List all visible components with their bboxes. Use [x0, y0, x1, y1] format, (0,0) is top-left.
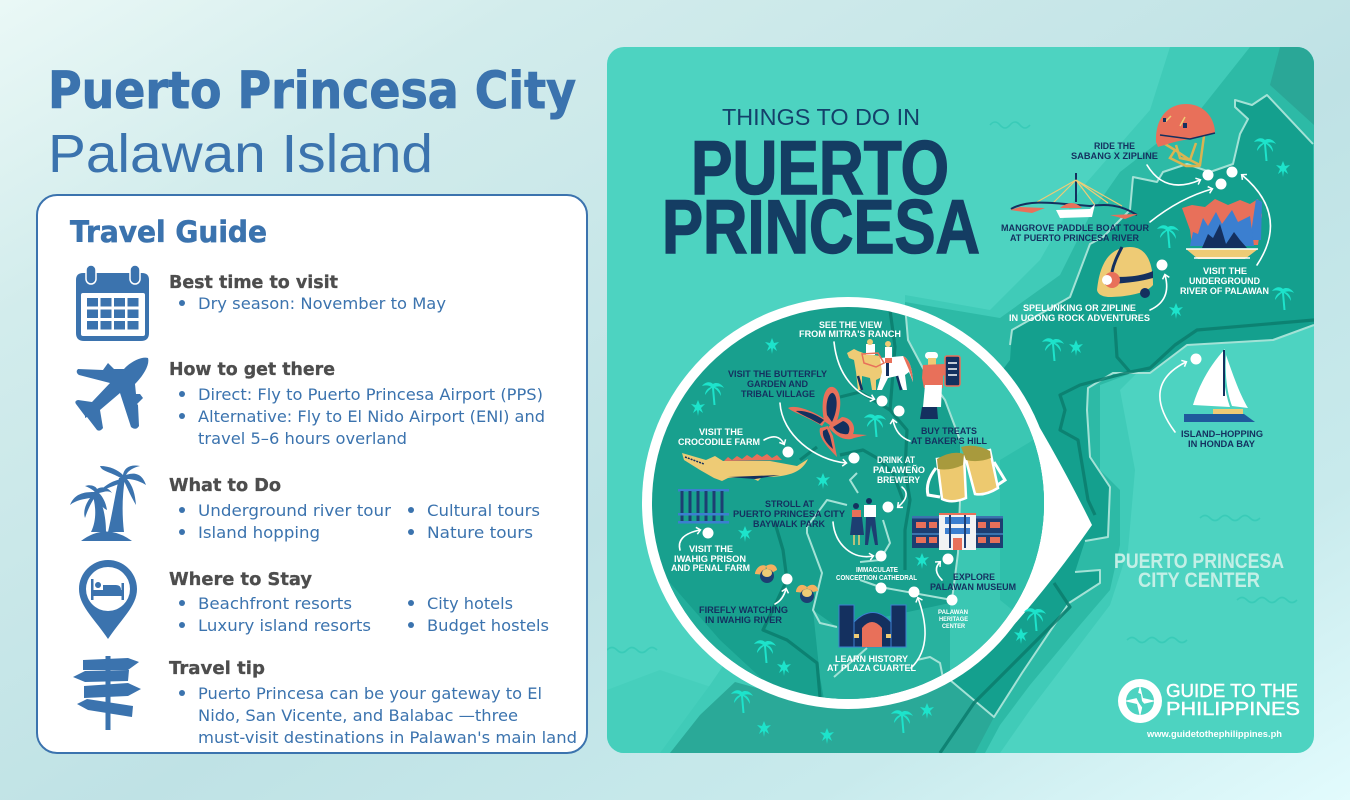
map: city center label: CITY CENTER — [1138, 569, 1260, 592]
map: attraction labels: VISIT THE — [699, 427, 744, 438]
map: attraction labels: FROM MITRA'S RANCH — [799, 329, 901, 340]
map: attraction labels: RIVER OF PALAWAN — [1180, 286, 1269, 297]
section: what to do — [169, 475, 540, 542]
illustration: yellow caving helmet — [1097, 247, 1153, 298]
title: Palawan Island — [48, 124, 433, 184]
map: attraction labels: IN IWAHIG RIVER — [705, 615, 782, 626]
panel: travel guide — [37, 195, 587, 753]
map: attraction labels: IN UGONG ROCK ADVENTURES — [1009, 313, 1151, 324]
map heading: PUERTO — [691, 126, 949, 211]
map: attraction labels: GARDEN AND — [747, 379, 808, 390]
map: location dots — [702, 166, 1238, 606]
section: travel tip: must-visit destinations in Palawan's main land — [198, 728, 577, 747]
map: attraction labels: STROLL AT — [765, 499, 814, 510]
map: teardrop pointer — [1012, 426, 1092, 626]
icon: signpost — [73, 656, 141, 730]
section: how to get there — [169, 359, 545, 448]
icon: location pin with bed — [79, 560, 137, 639]
title: Puerto Princesa City — [48, 62, 576, 121]
map: city center label — [1115, 554, 1284, 587]
map: attraction labels: UNDERGROUND — [1189, 276, 1260, 287]
illustration: beer mugs — [927, 446, 1005, 501]
section: where to stay: City hotels — [427, 594, 513, 613]
panel: map — [607, 47, 1314, 753]
section: how to get there: Direct: Fly to Puerto Princesa Airport (PPS) — [198, 385, 543, 404]
map: attraction labels: IWAHIG PRISON — [674, 554, 746, 565]
illustration: sailboat — [1184, 349, 1255, 422]
icon: palm trees — [70, 465, 146, 541]
map: attraction labels: AT PUERTO PRINCESA RIVER — [1010, 233, 1139, 244]
illustration: orange zipline helmet — [1156, 104, 1215, 166]
illustration: outrigger boat — [1010, 173, 1138, 219]
section: where to stay: Beachfront resorts — [198, 594, 352, 613]
map: attraction labels: FIREFLY WATCHING — [699, 605, 788, 616]
map heading: PRINCESA — [662, 185, 980, 270]
map: white circle frame — [642, 297, 1054, 709]
section: travel tip: Travel tip — [169, 658, 265, 679]
section: how to get there: Alternative: Fly to El Nido Airport (ENI) and — [198, 407, 545, 426]
map: route arrows — [679, 165, 1270, 668]
illustration: butterfly — [788, 387, 867, 457]
map: attraction labels — [671, 141, 1269, 674]
map: attraction labels: VISIT THE BUTTERFLY — [728, 369, 828, 380]
map: attraction labels: BUY TREATS — [921, 426, 978, 437]
logo: guide to the philippines: GUIDE TO THE — [1166, 681, 1298, 701]
icon: airplane — [75, 358, 148, 431]
section: travel tip: Nido, San Vicente, and Balabac —three — [198, 706, 518, 725]
map: city center label: PUERTO PRINCESA — [1114, 550, 1284, 573]
illustration: museum — [912, 513, 1003, 550]
section: what to do: Nature tours — [427, 523, 533, 542]
map: attraction labels: ISLAND–HOPPING — [1181, 429, 1263, 440]
map: attraction labels: BAYWALK PARK — [753, 519, 825, 530]
map: attraction labels: IMMACULATE — [856, 567, 898, 574]
illustration: couple — [850, 498, 878, 545]
map: attraction labels: MANGROVE PADDLE BOAT TOUR — [1001, 223, 1149, 234]
map: attraction labels: CONCEPTION CATHEDRAL — [836, 575, 918, 582]
map: zoomed city circle — [652, 307, 1044, 699]
section: best time to visit: Dry season: November to May — [198, 294, 446, 313]
map: attraction labels: AT BAKER'S HILL — [911, 436, 987, 447]
illustration: prison bars — [678, 489, 729, 524]
map: attraction labels: SPELUNKING OR ZIPLINE — [1023, 303, 1137, 314]
map: attraction labels: CROCODILE FARM — [678, 437, 760, 448]
map: attraction labels: SEE THE VIEW — [819, 320, 883, 331]
map heading — [666, 109, 980, 254]
section: where to stay: Luxury island resorts — [198, 616, 371, 635]
map: attraction labels: CENTER — [942, 624, 966, 630]
section: where to stay: Budget hostels — [427, 616, 549, 635]
heading: travel guide: Travel Guide — [70, 215, 267, 249]
section: where to stay — [169, 569, 549, 635]
section: travel tip — [169, 658, 577, 747]
map: attraction labels: IN HONDA BAY — [1188, 439, 1256, 450]
map: outside palms — [731, 138, 1294, 744]
map: attraction labels: DRINK AT — [877, 455, 915, 466]
map: attraction labels: VISIT THE — [689, 544, 734, 555]
illustration: plaza cuartel fort — [839, 605, 906, 647]
map: sea waves — [607, 122, 1297, 652]
illustration: crocodile — [682, 453, 808, 481]
section: best time to visit — [169, 272, 446, 313]
section: what to do: Underground river tour — [198, 501, 391, 520]
map: attraction labels: RIDE THE — [1094, 141, 1136, 152]
illustration: horses with riders — [847, 339, 913, 390]
logo: guide to the philippines: www.guidetothephilippines.ph — [1146, 729, 1282, 740]
map: attraction labels: SABANG X ZIPLINE — [1071, 151, 1159, 162]
map heading: THINGS TO DO IN — [722, 104, 920, 130]
map: attraction labels: LEARN HISTORY — [835, 654, 909, 665]
logo: guide to the philippines: PHILIPPINES — [1166, 699, 1300, 719]
icon: calendar — [76, 265, 149, 341]
section: what to do: Cultural tours — [427, 501, 540, 520]
map: attraction labels: HERITAGE — [939, 617, 968, 623]
map: attraction labels: PUERTO PRINCESA CITY — [733, 509, 846, 520]
section: how to get there: travel 5–6 hours overland — [198, 429, 407, 448]
section: best time to visit: Best time to visit — [169, 272, 338, 293]
map: attraction labels: PALAWAN — [938, 610, 968, 616]
section: where to stay: Where to Stay — [169, 569, 312, 590]
map: attraction labels: VISIT THE — [1203, 266, 1248, 277]
section: travel tip: Puerto Princesa can be your gateway to El — [198, 684, 542, 703]
map: attraction labels: PALAWEÑO — [873, 465, 926, 476]
section: how to get there: How to get there — [169, 359, 335, 380]
map: attraction labels: AND PENAL FARM — [671, 563, 750, 574]
map: attraction labels: BREWERY — [877, 475, 921, 486]
map: attraction labels: TRIBAL VILLAGE — [741, 389, 816, 400]
illustration: underground river cave — [1182, 199, 1262, 259]
map: sea and land layers — [607, 47, 1314, 753]
map: attraction labels: EXPLORE — [953, 572, 996, 583]
logo: guide to the philippines — [1118, 679, 1300, 740]
map: attraction labels: PALAWAN MUSEUM — [930, 582, 1016, 593]
map: attraction labels: AT PLAZA CUARTEL — [827, 663, 916, 674]
title — [48, 62, 576, 184]
section: what to do: What to Do — [169, 475, 281, 496]
section: what to do: Island hopping — [198, 523, 320, 542]
illustration: fireflies — [755, 564, 818, 603]
illustration: chef with menu — [920, 352, 960, 419]
